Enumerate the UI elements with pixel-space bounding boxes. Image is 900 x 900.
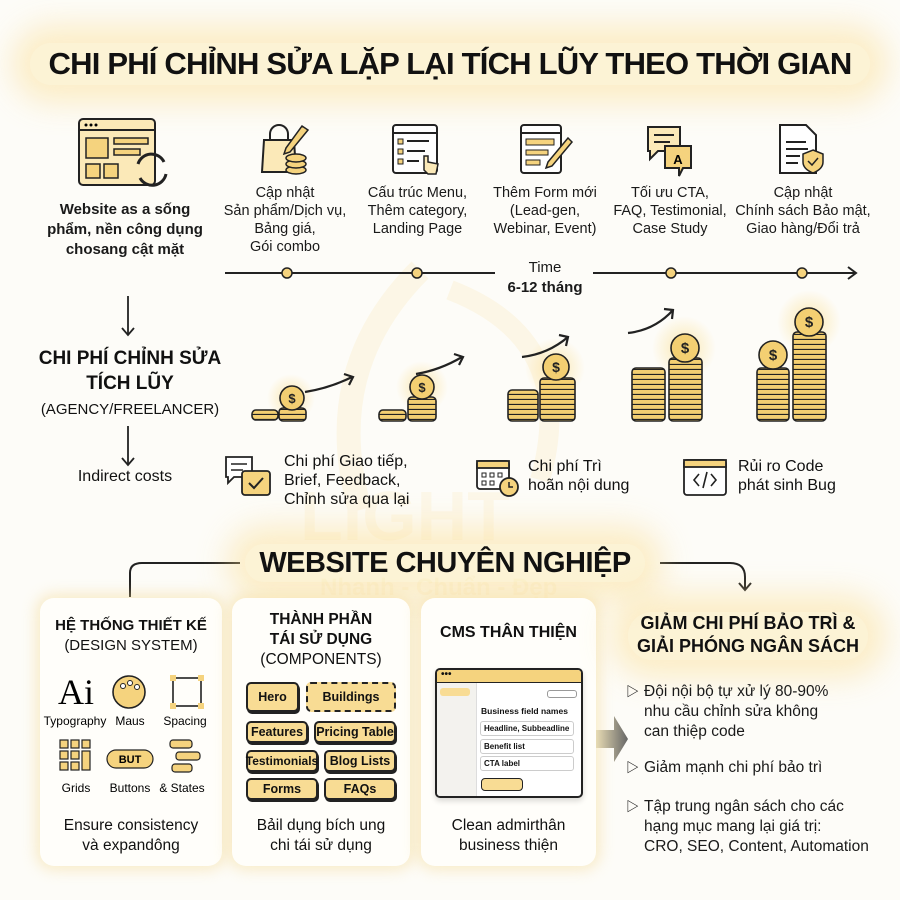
heading: CMS: CMS THÂN THIỆN — [440, 624, 577, 641]
list: benefits: Đội nội bộ tự xử lý 80-90% — [644, 683, 828, 700]
text: clean admin — [452, 817, 565, 854]
watermark logo: Nhanh - Chuẩn - Đẹp — [320, 574, 557, 601]
icon: document shield — [779, 124, 824, 174]
label: menu structure: Thêm category, — [368, 203, 467, 219]
icon grid: design tokens: Maus — [115, 714, 145, 728]
watermark logo: LIGHT — [300, 477, 510, 555]
text: communication costs: Chỉnh sửa qua lại — [284, 491, 409, 508]
component chips — [246, 682, 397, 802]
text: clean admin: business thiện — [459, 837, 558, 854]
component chips: Buildings — [323, 690, 379, 704]
chart: coin stacks — [251, 294, 838, 422]
component chips: Pricing Table — [316, 725, 394, 739]
list: benefits: Tập trung ngân sách cho các — [644, 798, 844, 815]
chart: coin stacks: $ — [805, 314, 814, 331]
label: CTA: Tối ưu CTA, — [631, 185, 709, 201]
component chips: Hero — [258, 690, 287, 704]
heading: reduce maintenance: GIẢI PHÓNG NGÂN SÁCH — [637, 636, 859, 656]
label: time — [507, 259, 582, 296]
icon grid: design tokens: BUT — [119, 754, 142, 766]
text: ensure consistency: Ensure consistency — [64, 817, 198, 834]
list: benefits: CRO, SEO, Content, Automation — [644, 838, 869, 855]
icon: chat bubbles: A — [673, 152, 683, 167]
text: code risk: Rủi ro Code — [738, 458, 823, 475]
icon grid: design tokens: Typography — [44, 714, 106, 728]
component chips: Blog Lists — [330, 754, 390, 768]
label: update products: Cập nhật — [256, 185, 314, 201]
heading: design system: HỆ THỐNG THIẾT KẾ — [55, 617, 207, 634]
chart: coin stacks: $ — [288, 391, 296, 406]
arrow: gray to results — [596, 716, 628, 762]
CMS fields: Benefit list — [484, 742, 525, 751]
list: benefits: ▷ — [626, 760, 639, 775]
CMS window mockup — [435, 668, 583, 798]
icon grid: design tokens: Ai — [58, 672, 94, 712]
component chips: Features — [251, 725, 303, 739]
label: update products: Bảng giá, — [254, 221, 316, 237]
label: update products: Sản phẩm/Dịch vụ, — [224, 203, 346, 219]
list: benefits: hạng mục mang lại giá trị: — [644, 818, 821, 835]
bracket connector — [129, 562, 752, 597]
arrow: down 2 — [121, 426, 135, 466]
text: delay costs: Chi phí Trì — [528, 458, 602, 475]
component chips: Forms — [263, 782, 301, 796]
heading: design system — [55, 616, 207, 654]
panel: design system — [40, 598, 222, 866]
icon: chat bubbles — [647, 126, 692, 176]
CMS fields — [480, 721, 574, 791]
label: time: Time — [529, 259, 561, 276]
heading: professional website: WEBSITE CHUYÊN NGHIỆP — [259, 547, 631, 579]
label: new form: Thêm Form mới — [493, 185, 597, 201]
CMS window mockup: Business field names — [481, 706, 568, 716]
heading: accumulated costs: (AGENCY/FREELANCER) — [41, 401, 219, 418]
watermark logo — [300, 262, 560, 601]
label: new form — [493, 185, 597, 237]
label: CTA: FAQ, Testimonial, — [613, 203, 727, 219]
text: indirect costs: Indirect costs — [78, 468, 172, 485]
label: CTA — [613, 185, 727, 237]
icon: form with pen — [520, 124, 573, 174]
heading: accumulated costs: CHI PHÍ CHỈNH SỬA — [39, 348, 221, 369]
text: code risk — [738, 458, 836, 494]
timeline — [225, 266, 858, 280]
panel: CMS — [421, 598, 596, 866]
icon grid: design tokens: & States — [159, 781, 205, 795]
title: CHI PHÍ CHỈNH SỬA LẶP LẠI TÍCH LŨY THEO THỜI GIAN — [49, 46, 851, 81]
text: communication costs — [284, 453, 409, 508]
label: policies — [735, 185, 871, 237]
label: new form: Webinar, Event) — [494, 221, 596, 237]
label: update products — [224, 185, 346, 255]
icon grid: design tokens — [44, 672, 207, 795]
heading: accumulated costs — [39, 346, 221, 418]
label: update products: Gói combo — [250, 239, 320, 255]
text: communication costs: Brief, Feedback, — [284, 472, 400, 489]
heading: reduce maintenance: GIẢM CHI PHÍ BẢO TRÌ & — [640, 613, 856, 633]
label: new form: (Lead-gen, — [510, 203, 580, 219]
component chips: FAQs — [344, 782, 376, 796]
chart: coin stacks: $ — [769, 347, 778, 364]
heading: design system: (DESIGN SYSTEM) — [64, 637, 198, 654]
icon: calendar clock — [476, 460, 519, 497]
heading: reduce maintenance — [628, 612, 868, 660]
text: delay costs — [528, 458, 629, 494]
label: policies: Giao hàng/Đổi trả — [746, 221, 860, 237]
label: time: 6-12 tháng — [507, 279, 582, 296]
chart: coin stacks: $ — [418, 380, 426, 395]
label: policies: Cập nhật — [774, 185, 832, 201]
icon grid: design tokens: Buttons — [110, 781, 150, 795]
text: reuse: Bảil dụng bích ung — [257, 817, 385, 834]
arrow: down 1 — [121, 296, 135, 336]
icon: shopping bag — [260, 124, 309, 175]
text: reuse: chi tái sử dụng — [270, 837, 372, 854]
component chips: Testimonials — [246, 754, 318, 768]
heading: components — [260, 610, 382, 668]
CMS window mockup: ••• — [441, 669, 452, 680]
list: benefits: ▷ — [626, 799, 639, 814]
list: benefits: can thiệp code — [644, 723, 745, 740]
text: ensure consistency — [64, 817, 198, 854]
icon: code window — [683, 459, 727, 496]
text: ensure consistency: và expandông — [82, 837, 180, 854]
text: reuse — [257, 817, 385, 854]
label: menu structure: Cấu trúc Menu, — [368, 185, 467, 201]
label: policies: Chính sách Bảo mật, — [735, 203, 871, 219]
list: benefits: ▷ — [626, 684, 639, 699]
chart: coin stacks: $ — [552, 359, 560, 375]
list: benefits: Giảm mạnh chi phí bảo trì — [644, 759, 822, 776]
label: menu structure: Landing Page — [373, 221, 462, 237]
list: benefits: nhu cầu chỉnh sửa không — [644, 703, 818, 720]
icon grid: design tokens: Spacing — [163, 714, 207, 728]
text: website as living product: Website as a sống phẩm, nền công dụng chosang cật mặt — [47, 201, 203, 258]
text: clean admin: Clean admirthân — [452, 817, 565, 834]
label: menu structure — [368, 185, 467, 237]
heading: components: TÁI SỬ DỤNG — [270, 631, 372, 648]
heading: components: THÀNH PHẦN — [270, 611, 372, 628]
text: delay costs: hoãn nội dung — [528, 477, 629, 494]
icon: chat check — [225, 456, 271, 496]
text: communication costs: Chi phí Giao tiếp, — [284, 453, 408, 470]
icon: website refresh — [78, 118, 168, 187]
CMS fields: Headline, Subbeadline — [484, 724, 569, 733]
CMS fields: CTA label — [484, 759, 520, 768]
label: CTA: Case Study — [633, 221, 707, 237]
heading: components: (COMPONENTS) — [260, 651, 382, 668]
heading: accumulated costs: TÍCH LŨY — [86, 373, 174, 394]
chart: coin stacks: $ — [681, 340, 690, 357]
list: benefits — [626, 683, 869, 855]
text: code risk: phát sinh Bug — [738, 477, 836, 494]
panel: components — [232, 598, 410, 866]
icon: menu structure — [392, 124, 439, 175]
icon grid: design tokens: Grids — [62, 781, 90, 795]
